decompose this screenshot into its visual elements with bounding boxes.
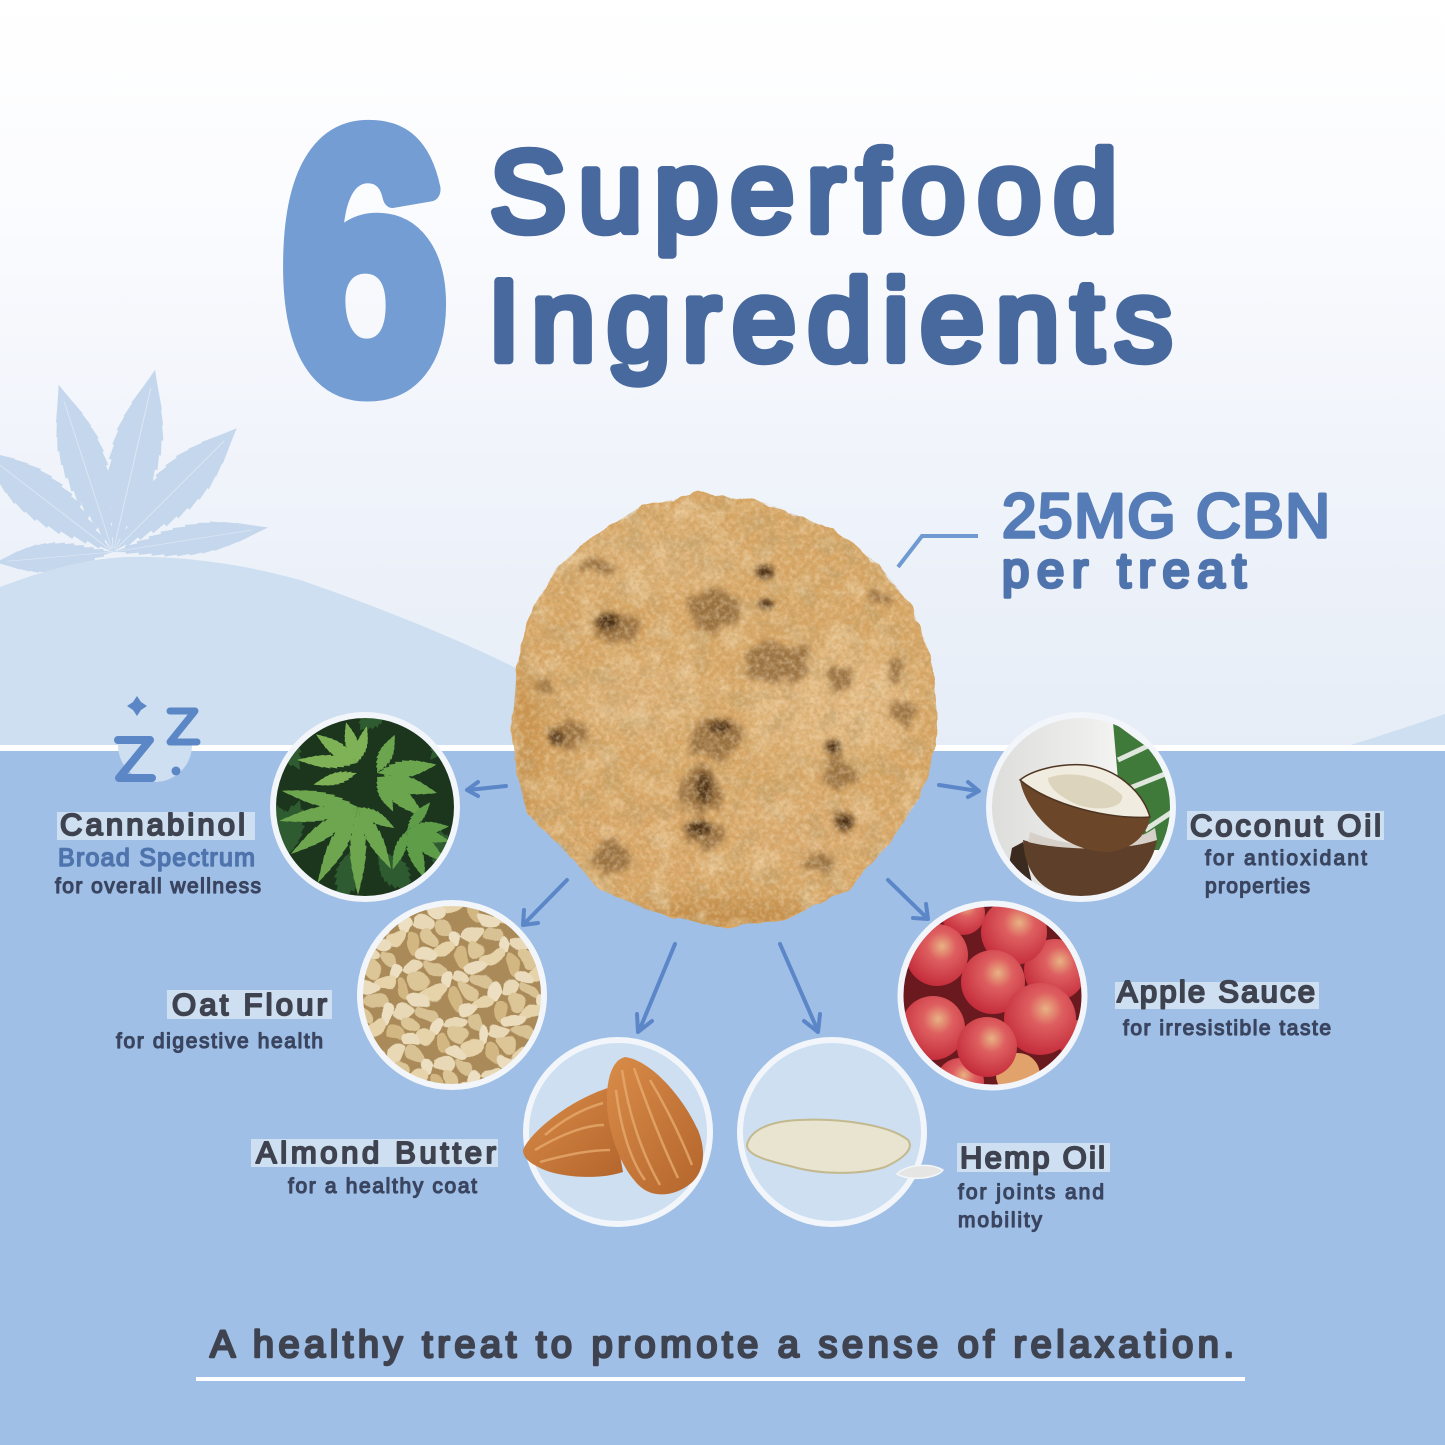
ingredient image: hemp oil [740,1040,943,1224]
ingredient label: almond butter: for a healthy coat [288,1175,477,1198]
ingredient label: apple sauce: for irresistible taste [1123,1017,1331,1040]
decorative hemp leaf [0,364,270,577]
ingredient label: oat flour: for digestive health [116,1030,323,1053]
ingredient label: coconut oil: properties [1205,875,1310,898]
tagline: A healthy treat to promote a sense of relaxation. [210,1324,1234,1366]
ingredient label: coconut oil [1187,808,1384,898]
arrows from treat to ingredients [467,782,979,1032]
ingredient label: cannabinol [55,807,261,898]
ingredient label: hemp oil: Hemp Oil [960,1140,1105,1175]
upper right leaf cluster [376,735,437,813]
ingredient image: oat flour [355,900,550,1090]
callout: 25mg CBN per treat [1002,482,1330,598]
treat: cookie [500,480,950,940]
upper coconut half [1020,780,1150,852]
ingredient image: apple sauce [898,900,1088,1090]
callout: 25mg CBN per treat: 25MG CBN [1002,482,1330,551]
background: left hill [0,557,520,750]
zzz icon [118,696,197,782]
callout: 25mg CBN per treat: per treat [1002,544,1246,598]
ingredient label: cannabinol: Cannabinol [60,807,245,842]
ingredient label: apple sauce: Apple Sauce [1117,974,1315,1009]
background: sky gradient [0,0,1445,750]
palm leaf [1113,724,1170,850]
title [282,57,1172,464]
ingredient label: apple sauce [1115,974,1331,1040]
front almond [607,1057,703,1194]
oil drop [897,1165,943,1178]
ingredient label: coconut oil: Coconut Oil [1190,808,1381,843]
ingredient label: cannabinol: Broad Spectrum [58,844,255,872]
ingredient label: hemp oil: for joints and [958,1181,1104,1204]
oil puddle [747,1120,910,1173]
background: lower blue panel [0,748,1445,1445]
ingredient label: oat flour [116,987,332,1053]
ingredient image: coconut oil [985,712,1180,902]
big numeral 6: 6 [282,57,447,464]
ingredient label: cannabinol: for overall wellness [55,875,261,898]
ingredient label: coconut oil: for antioxidant [1205,847,1367,870]
ingredient label: hemp oil [957,1140,1110,1232]
ingredient label: almond butter [251,1135,498,1198]
leader line to 25MG CBN [898,536,978,567]
lower right leaf cluster [392,802,449,876]
central leaf [278,783,398,895]
coconut flesh [1020,765,1150,817]
back almond [523,1088,623,1177]
ingredient image: almond butter [523,1040,710,1224]
ingredient image: cannabis [270,712,460,902]
title line: Superfood: Superfood [490,129,1117,256]
title line: Ingredients: Ingredients [488,258,1172,385]
ingredient label: hemp oil: mobility [958,1209,1042,1232]
lower coconut half [1010,842,1032,882]
ingredient label: almond butter: Almond Butter [256,1135,496,1170]
horizon line [0,745,1445,751]
ingredient label: oat flour: Oat Flour [172,987,327,1022]
background: right hill [1340,714,1445,748]
upper left leaf cluster [297,722,368,786]
